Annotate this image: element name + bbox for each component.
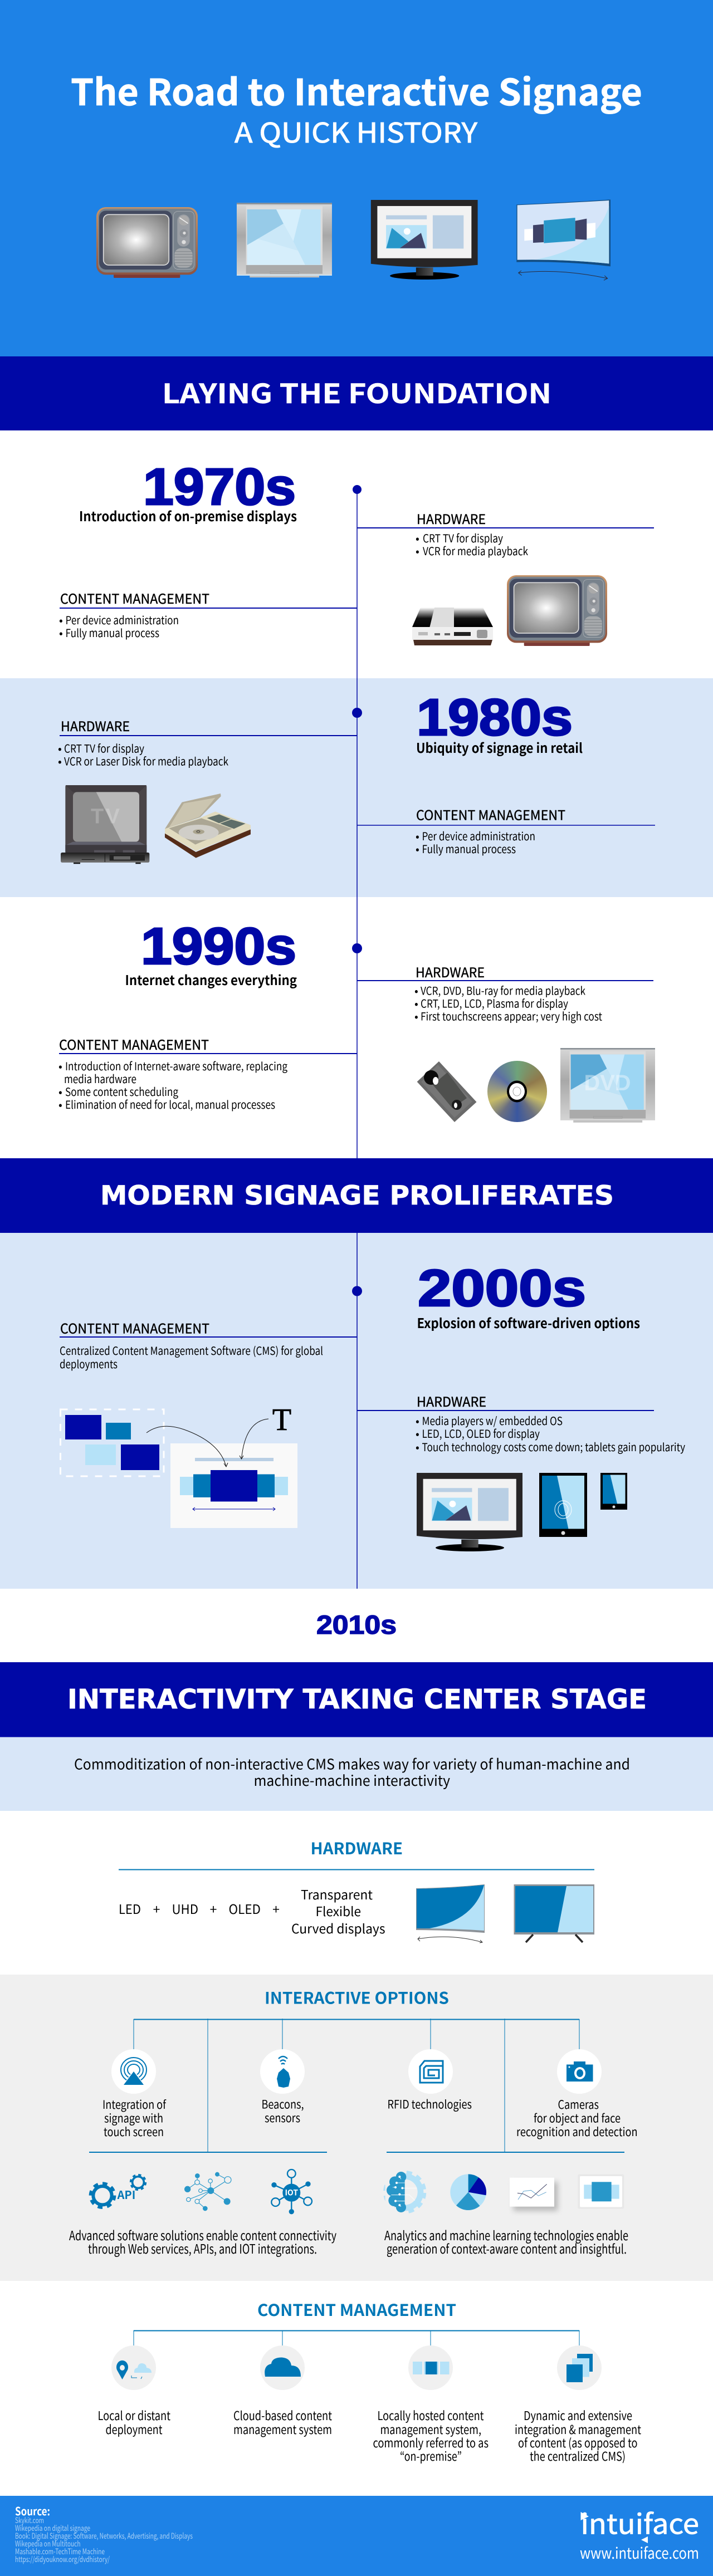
display technologies: Transparent — [301, 1884, 373, 1903]
hardware block — [357, 962, 653, 1023]
caption: advanced software — [69, 2225, 336, 2257]
icon: layout card — [578, 2174, 624, 2209]
option: dynamic integration: integration & management — [515, 2420, 641, 2438]
icon: flat monitor — [371, 200, 478, 280]
content management block: Centralized Content Management Software (CMS) for global — [60, 1342, 323, 1358]
sources: Mashable.com-TechTime Machine — [15, 2546, 105, 2557]
option: beacons: sensors — [265, 2109, 300, 2126]
panel: hardware — [119, 1836, 594, 1943]
icon: black crt tv on vcr — [61, 785, 149, 864]
icon: curved screen — [416, 1884, 485, 1943]
icon: api gears: API — [117, 2186, 135, 2202]
band: interactivity taking center stage — [0, 1662, 713, 1737]
panel: commoditization statement: Commoditization of non-interactive CMS makes way for variety of human-machine and — [74, 1753, 630, 1774]
option: cameras: recognition and detection — [516, 2123, 637, 2140]
hardware block: HARDWARE — [416, 962, 485, 981]
option: local or distant — [98, 2345, 170, 2438]
diagram: content layout — [60, 1403, 297, 1528]
content management block — [60, 1318, 357, 1372]
icon: tablet — [539, 1473, 587, 1537]
timeline dot — [353, 485, 362, 494]
hardware block: • — [416, 1425, 419, 1441]
hardware block: Media players w/ embedded OS — [422, 1412, 563, 1428]
icon: iot hub: IOT — [285, 2187, 298, 2198]
heading: 2010s: 2010s — [316, 1610, 397, 1639]
hardware block: HARDWARE — [61, 716, 130, 735]
hardware block: First touchscreens appear; very high cost — [421, 1008, 602, 1023]
sources: Wikepedia on Multitouch — [15, 2538, 80, 2549]
display technologies: + — [272, 1899, 280, 1918]
content management block: • — [58, 1083, 62, 1099]
content management block: • — [59, 624, 63, 640]
option: local or distant: Local or distant — [98, 2406, 170, 2424]
decade heading: 1980s — [417, 688, 573, 746]
hardware block: • — [58, 740, 62, 756]
option: cloud based: management system — [233, 2420, 332, 2438]
hardware block: • — [58, 753, 62, 768]
option: cloud based: Cloud-based content — [233, 2406, 332, 2424]
logo: intuiface — [580, 2502, 699, 2564]
panel: commoditization statement — [0, 1737, 713, 1811]
icon: silver crt tv — [237, 203, 332, 277]
panel background: 1980s — [0, 678, 713, 897]
hardware block: CRT TV for display — [423, 530, 503, 546]
icon: retro tv — [96, 207, 198, 278]
timeline dot — [352, 1286, 362, 1296]
panel background: 2000s — [0, 1233, 713, 1589]
display technologies: Flexible — [315, 1901, 361, 1920]
heading: HARDWARE — [311, 1836, 403, 1859]
content management block: Fully manual process — [422, 840, 516, 856]
display technologies: Curved displays — [291, 1918, 385, 1937]
display technologies: + — [153, 1899, 160, 1918]
band: laying the foundation — [0, 356, 713, 430]
icon: laser disc player — [165, 794, 251, 858]
hardware block: VCR for media playback — [423, 542, 528, 559]
option: cloud based — [233, 2345, 332, 2438]
sources: https://didyouknow.org/dvdhistory/ — [15, 2554, 110, 2565]
content management block: • — [416, 840, 419, 856]
panel: 1990s — [58, 917, 655, 1123]
decade heading: 1990s — [141, 917, 296, 975]
panel: content management — [98, 2298, 641, 2465]
panel: 2000s — [60, 1259, 685, 1551]
decade subtitle: Explosion of software-driven options — [417, 1313, 640, 1332]
icon: monitor — [417, 1473, 522, 1551]
icon: vhs tape — [417, 1061, 477, 1122]
decade subtitle: Introduction of on-premise displays — [79, 506, 297, 525]
option: locally hosted: management system, — [380, 2420, 481, 2438]
panel: 1970s — [59, 458, 654, 646]
header background — [0, 0, 713, 356]
icon: dvd on tv: DVD — [584, 1071, 631, 1095]
sources: Skykit.com — [15, 2515, 44, 2526]
content management block: Some content scheduling — [65, 1083, 178, 1099]
hardware block: • — [414, 982, 418, 998]
footer — [0, 2496, 713, 2576]
icon: tv on stand — [514, 1884, 594, 1942]
hardware block — [357, 508, 654, 559]
content management block: • — [58, 1057, 62, 1074]
display technologies: UHD — [172, 1899, 198, 1918]
hardware block: • — [416, 542, 419, 559]
content management block — [59, 588, 357, 640]
option: local or distant: deployment — [106, 2420, 163, 2438]
hardware block: • — [416, 530, 419, 546]
decade subtitle: Ubiquity of signage in retail — [416, 737, 583, 757]
option: locally hosted: commonly referred to as — [373, 2433, 489, 2451]
content management block: • — [416, 827, 419, 844]
panel: 1980s — [58, 688, 655, 864]
option: cameras: for object and face — [534, 2109, 621, 2126]
hardware block: VCR, DVD, Blu-ray for media playback — [421, 982, 585, 998]
title: The Road to Interactive Signage — [71, 63, 642, 116]
icon: curved display — [516, 199, 611, 280]
heading: INTERACTIVE OPTIONS — [265, 1986, 449, 2009]
option: dynamic integration: the centralized CMS) — [530, 2447, 626, 2465]
sources — [15, 2502, 193, 2565]
timeline spine — [356, 489, 358, 1589]
hardware block: CRT, LED, LCD, Plasma for display — [421, 995, 568, 1011]
icon: vcr — [412, 608, 493, 645]
option: dynamic integration: of content (as opposed to — [518, 2433, 637, 2451]
hardware block: HARDWARE — [417, 1391, 486, 1411]
option: dynamic integration — [515, 2345, 641, 2465]
content management block: Per device administration — [422, 827, 535, 844]
icon: api gears — [90, 2175, 145, 2207]
content management block: deployments — [60, 1355, 118, 1372]
hardware block: • — [416, 1438, 419, 1454]
display technologies: OLED — [228, 1899, 261, 1918]
content management block: CONTENT MANAGEMENT — [60, 588, 209, 608]
content management block: • — [58, 1096, 62, 1112]
display technologies: + — [210, 1899, 217, 1918]
timeline dot — [352, 943, 362, 953]
content management block: Elimination of need for local, manual processes — [65, 1096, 275, 1112]
option: beacons — [260, 2049, 305, 2126]
icon: brain and gear — [385, 2170, 424, 2215]
icon: dvd on tv — [560, 1048, 655, 1123]
icon: black crt tv on vcr: TV — [91, 805, 121, 828]
content management block: • — [59, 611, 63, 628]
content management block: CONTENT MANAGEMENT — [416, 804, 565, 824]
display technologies: LED — [119, 1899, 141, 1918]
caption: analytics: Analytics and machine learning technologies enable — [384, 2225, 628, 2244]
hardware block: HARDWARE — [417, 508, 486, 528]
hardware block: • — [416, 1412, 419, 1428]
hardware block: VCR or Laser Disk for media playback — [64, 753, 228, 768]
caption: advanced software: through Web services, APIs, and IOT integrations. — [88, 2239, 317, 2257]
diagram: content layout: T — [272, 1403, 291, 1437]
panel: commoditization statement: machine-machine interactivity — [254, 1770, 450, 1790]
band: laying the foundation: LAYING THE FOUNDATION — [162, 372, 551, 411]
caption: analytics: generation of context-aware content and insightful. — [387, 2239, 627, 2257]
sources: Book: Digital Signage: Software, Networks, Advertising, and Displays — [15, 2530, 193, 2541]
option: touch screen: signage with — [104, 2109, 163, 2126]
sources: Source: — [15, 2502, 50, 2519]
hardware block — [58, 716, 357, 768]
option: cameras — [516, 2049, 637, 2140]
hardware block: • — [414, 1008, 418, 1023]
icon: network nodes — [184, 2172, 231, 2211]
option: touch screen: touch screen — [104, 2123, 164, 2140]
heading: CONTENT MANAGEMENT — [257, 2298, 456, 2321]
icon: iot hub — [271, 2169, 312, 2214]
hardware block: LED, LCD, OLED for display — [422, 1425, 540, 1441]
panel: interactive options — [0, 1975, 713, 2281]
option: rfid — [388, 2049, 472, 2113]
logo: intuiface: intuiface — [580, 2502, 699, 2543]
content management block: media hardware — [64, 1070, 136, 1086]
hardware block — [357, 1391, 685, 1454]
option: locally hosted — [373, 2345, 489, 2465]
decade subtitle: Internet changes everything — [125, 969, 297, 989]
band: interactivity taking center stage: INTERACTIVITY TAKING CENTER STAGE — [67, 1684, 647, 1715]
icon: line chart card — [510, 2178, 558, 2211]
chart: pie — [450, 2174, 486, 2210]
band: modern signage proliferates — [0, 1158, 713, 1233]
content management block: Introduction of Internet-aware software, replacing — [65, 1057, 287, 1074]
option: touch screen: Integration of — [102, 2096, 167, 2113]
content management block: CONTENT MANAGEMENT — [60, 1318, 209, 1338]
connector tree — [134, 2330, 579, 2345]
hardware block: • — [414, 995, 418, 1011]
band: modern signage proliferates: MODERN SIGNAGE PROLIFERATES — [100, 1181, 614, 1211]
display technologies — [119, 1884, 385, 1937]
content management block — [58, 1034, 357, 1112]
option: rfid: RFID technologies — [388, 2096, 472, 2113]
timeline dot — [352, 708, 362, 718]
option: locally hosted: Locally hosted content — [378, 2406, 484, 2424]
content management block: CONTENT MANAGEMENT — [59, 1034, 209, 1054]
connector tree — [89, 2019, 624, 2152]
content management block — [357, 804, 655, 856]
decade heading: 1970s — [143, 458, 296, 516]
option: cameras: Cameras — [558, 2096, 599, 2113]
icon: dvd disc — [487, 1061, 547, 1122]
sources: Wikepedia on digital signage — [15, 2523, 90, 2534]
subtitle: A QUICK HISTORY — [235, 111, 478, 151]
option: dynamic integration: Dynamic and extensive — [524, 2406, 632, 2424]
caption: analytics — [384, 2225, 628, 2257]
option: touch screen — [102, 2049, 167, 2140]
icon: phone — [600, 1473, 627, 1510]
content management block: Per device administration — [66, 611, 179, 628]
decade heading: 2000s — [418, 1259, 586, 1317]
option: locally hosted: “on-premise” — [400, 2447, 462, 2465]
caption: advanced software: Advanced software solutions enable content connectivity — [69, 2225, 336, 2244]
icon: retro tv — [507, 575, 607, 646]
content management block: Fully manual process — [66, 624, 159, 640]
hardware block: CRT TV for display — [64, 740, 144, 756]
option: beacons: Beacons, — [262, 2096, 304, 2113]
